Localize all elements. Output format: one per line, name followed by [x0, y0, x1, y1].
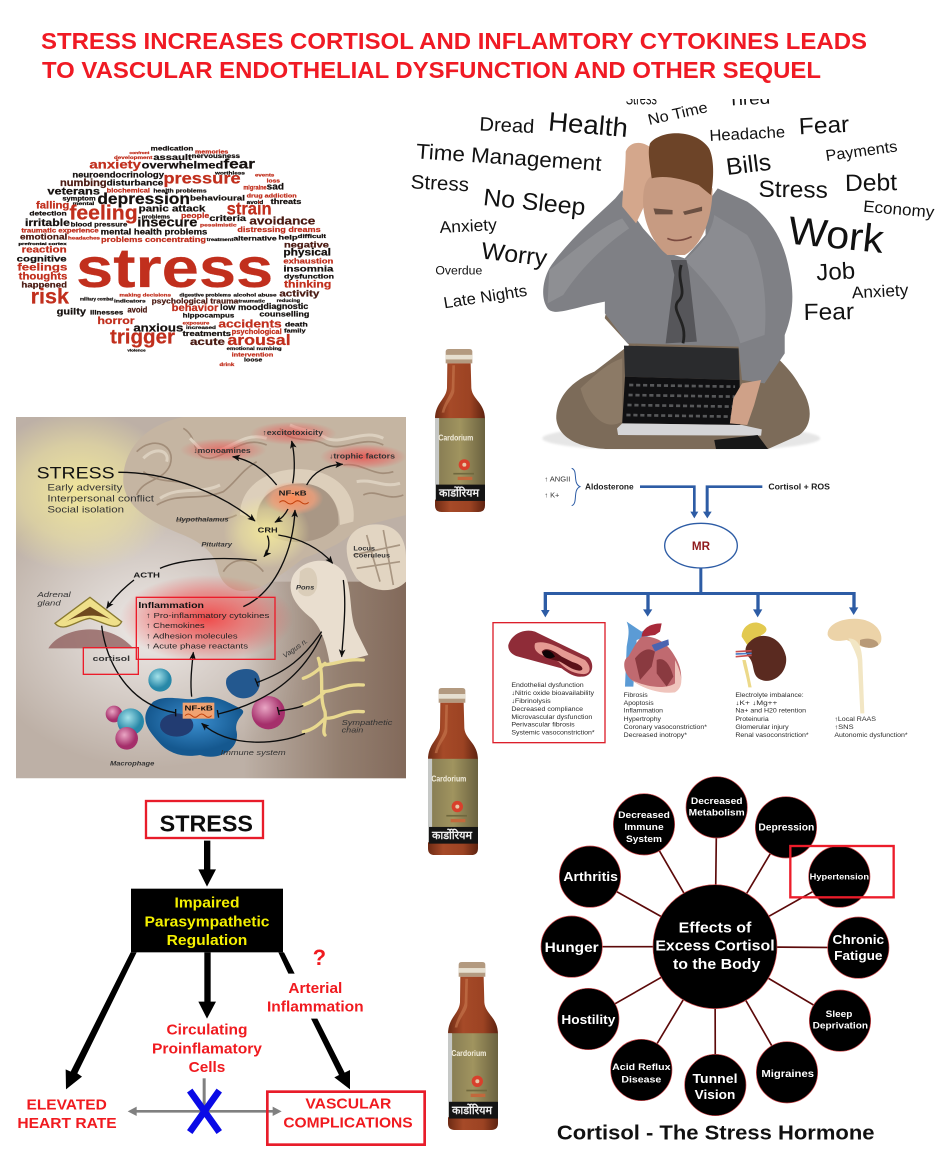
node: sleep deprivation: Deprivation	[813, 1020, 868, 1030]
panel: stress word cloud brain: medication	[151, 146, 193, 153]
panel: mineralocorticoid receptor diagram	[493, 468, 908, 743]
laptop	[617, 346, 768, 449]
red labels: HEART RATE	[17, 1115, 117, 1132]
panel: stress word cloud brain: psychological trauma	[152, 296, 239, 305]
node: decreased metabolism: Metabolism	[689, 808, 745, 818]
brain labels: NF-κB	[279, 488, 307, 497]
node: acid reflux disease: Disease	[621, 1074, 661, 1084]
inflammation callout box: ↑ Adhesion molecules	[146, 631, 238, 640]
panel: stress flow chart	[17, 801, 425, 1145]
panel: stress word cloud brain: behavioural	[190, 194, 245, 203]
panel: stress word cloud brain: prefrontal cortex	[18, 241, 68, 246]
MR oval	[665, 523, 737, 568]
kidney column: Electrolyte imbalance:	[735, 692, 804, 699]
panel: stress word cloud brain: difficult	[298, 234, 326, 240]
node: hunger	[541, 916, 602, 977]
panel: stress word cloud brain: illnesses	[90, 309, 124, 316]
stress heading in brain panel: Early adversity	[47, 482, 123, 492]
italic anatomy labels: Pons	[296, 586, 315, 592]
node: depression: Depression	[758, 823, 814, 834]
panel: stress word cloud brain: problems	[142, 214, 170, 220]
panel: stress word cloud brain: traumatic experience	[21, 228, 100, 234]
heart column: Inflammation	[624, 708, 664, 715]
blood vessel column with red box: Perivascular fibrosis	[511, 722, 575, 729]
panel: stress word cloud brain: veterans	[47, 186, 101, 197]
panel: stress word cloud brain: diagnostic	[263, 302, 309, 311]
stress heading in brain panel: STRESS	[37, 463, 115, 482]
stress box	[146, 801, 263, 838]
brain labels: ↓trophic factors	[329, 453, 395, 460]
node: arthritis: Arthritis	[563, 869, 618, 884]
panel: stress word cloud brain: happened	[21, 281, 67, 290]
heart column: Coronary vasoconstriction*	[624, 724, 708, 731]
floating stress words: Job	[816, 258, 856, 286]
kidney column: ↓K+ ↓Mg++	[735, 700, 778, 707]
italic anatomy labels: Pituitary	[201, 542, 233, 548]
panel: stress word cloud brain: falling	[36, 201, 69, 212]
panel: stress word cloud brain: activity	[279, 289, 319, 299]
panel: stress word cloud brain: avoid	[127, 305, 147, 315]
panel: stress word cloud brain: headaches	[68, 235, 101, 240]
node: chronic fatigue: Fatigue	[834, 949, 882, 963]
blood vessel column with red box: ↓Fibrinolysis	[511, 698, 551, 705]
heart column	[624, 622, 708, 739]
inputs: ↑ ANGII	[544, 477, 570, 484]
panel: stress word cloud brain: arousal	[227, 333, 291, 349]
node: tunnel vision: Tunnel	[692, 1072, 737, 1086]
icon: tonic bottle 2: Cardorium	[431, 775, 466, 784]
panel: stress word cloud brain: nervousness	[192, 153, 240, 160]
icon: tonic bottle 2	[428, 688, 478, 855]
adrenal gland	[48, 597, 133, 648]
panel: stress word cloud brain: panic attack	[139, 204, 205, 214]
panel: stress word cloud brain: events	[255, 173, 275, 178]
panel: stress word cloud brain: risk	[31, 284, 69, 308]
hub: Effects of	[679, 921, 751, 937]
panel: stress word cloud brain: trigger	[110, 326, 175, 348]
panel: stress word cloud brain: treatment	[207, 237, 234, 242]
node: decreased immune system	[613, 794, 675, 855]
floating stress words: Headache	[709, 124, 786, 145]
floating stress words: Tired	[727, 90, 771, 110]
blood vessel column with red box: ↓Nitric oxide bioavailability	[511, 690, 595, 697]
inflammation callout box	[136, 597, 275, 659]
inflammation callout box: ↑ Chemokines	[146, 621, 205, 630]
kidney column: Na+ and H20 retention	[735, 708, 807, 715]
spokes	[572, 807, 858, 1085]
NF-kB macrophage tag	[183, 703, 214, 719]
vascular complications box	[267, 1092, 425, 1145]
pathway arrows	[102, 441, 345, 742]
icon: tonic bottle 3	[448, 962, 498, 1130]
main word: stress: stress	[76, 236, 273, 299]
italic anatomy labels: gland	[37, 599, 62, 608]
panel: stress word cloud brain: mental health problems	[101, 227, 208, 236]
panel: stress word cloud brain: exhaustion	[283, 257, 334, 266]
icon: tonic bottle 2: कार्डोरियम	[431, 828, 473, 842]
icon: tonic bottle 1: कार्डोरियम	[438, 485, 480, 499]
panel: stress word cloud brain: counselling	[259, 309, 310, 318]
italic anatomy labels: Immune system	[221, 748, 286, 757]
arrow: to elevated heart rate	[66, 952, 137, 1089]
floating stress words: Economy	[862, 197, 936, 222]
blood vessel column with red box: Microvascular dysfunction	[511, 714, 593, 721]
panel: stress word cloud brain: disturbance	[107, 179, 164, 188]
red labels: Circulating	[166, 1022, 247, 1039]
panel: stress word cloud brain: family	[284, 328, 307, 334]
panel: stress word cloud brain: strain	[227, 198, 272, 218]
panel: stress word cloud brain: blood pressure	[71, 221, 128, 228]
panel: stress word cloud brain: increased	[186, 325, 216, 331]
panel: stress word cloud brain: help	[278, 235, 298, 242]
node: acid reflux disease: Acid Reflux	[612, 1062, 671, 1072]
floating stress words: Fear	[798, 111, 850, 140]
panel: stressed man photo with words	[410, 88, 936, 452]
panel: stress word cloud brain: dysfunction	[284, 273, 334, 280]
panel: stress word cloud brain: intervention	[232, 353, 274, 359]
floating stress words	[410, 88, 936, 326]
blood vessel column with red box: Systemic vasoconstriction*	[511, 730, 595, 737]
MR oval: MR	[692, 540, 711, 553]
panel: stress word cloud brain: confront	[129, 150, 150, 155]
blue cross	[192, 1093, 217, 1129]
panel: stress word cloud brain: overwhelmed	[142, 161, 223, 172]
panel: stress word cloud brain: traumatic	[238, 298, 265, 304]
node: hypertension: Hypertension	[810, 872, 869, 882]
panel: stress word cloud brain: people	[181, 211, 209, 220]
panel: stress word cloud brain: worthless	[214, 170, 245, 176]
italic anatomy labels: Macrophage	[110, 761, 155, 767]
panel: stress word cloud brain: sad	[267, 181, 284, 191]
red labels: ?	[313, 945, 326, 970]
kidney column: Renal vasoconstriction*	[735, 732, 809, 739]
panel: stress word cloud brain: assault	[153, 152, 192, 162]
arrow: to vascular complications	[311, 1019, 350, 1089]
seated man figure	[542, 133, 820, 452]
panel: stress word cloud brain: exposure	[183, 320, 210, 325]
panel: stress word cloud brain: detection	[29, 211, 67, 218]
floating stress words: Stress	[758, 176, 828, 204]
node: decreased metabolism	[686, 777, 747, 838]
italic anatomy labels: Adrenal	[36, 590, 71, 599]
node: hypertension	[809, 846, 870, 907]
icon: tonic bottle 3: Cardorium	[451, 1049, 486, 1058]
node: decreased immune system: Immune	[624, 822, 664, 832]
brain labels: ↓monoamines	[193, 448, 251, 455]
caption: Cortisol - The Stress Hormone	[557, 1121, 874, 1144]
panel: stress word cloud brain: irritable	[25, 218, 71, 229]
regulation box: Impaired	[174, 895, 239, 912]
icon: tonic bottle 1	[435, 349, 485, 512]
inputs: Cortisol + ROS	[768, 481, 830, 491]
panel: stress word cloud brain: emotional numbing	[227, 346, 282, 352]
floating stress words: Overdue	[435, 264, 483, 277]
panel: stress word cloud brain: accidents	[218, 318, 282, 330]
node: depression	[755, 797, 817, 858]
panel: stress word cloud brain: fear	[223, 155, 256, 171]
panel: stress word cloud brain: threats	[271, 197, 301, 206]
panel: stress word cloud brain: military combat	[80, 297, 114, 302]
icon: tonic bottle 1: Cardorium	[438, 433, 473, 442]
panel: stress word cloud brain	[17, 146, 334, 367]
vascular complications box: VASCULAR	[305, 1096, 392, 1113]
brain labels: ACTH	[133, 571, 161, 580]
panel: stress word cloud brain: criteria	[209, 213, 246, 223]
regulation box: Regulation	[167, 932, 247, 949]
blood vessel column with red box: Endothelial dysfunction	[511, 682, 584, 689]
italic anatomy labels: Locus	[353, 547, 376, 553]
panel: stress word cloud brain: reaction	[22, 245, 67, 255]
brain labels: cortisol	[93, 654, 130, 663]
red labels: Inflammation	[267, 999, 364, 1016]
node: migraines: Migraines	[761, 1069, 814, 1080]
panel: stress word cloud brain: horror	[97, 316, 135, 327]
panel: stress word cloud brain: thoughts	[19, 272, 67, 283]
red labels: ELEVATED	[26, 1097, 107, 1114]
panel: stress word cloud brain: psychological	[232, 329, 282, 336]
brain labels: ↑excitotoxicity	[262, 430, 323, 437]
panel: stress word cloud brain: health problems	[153, 188, 207, 194]
panel: stress word cloud brain: acute	[190, 337, 225, 348]
italic anatomy labels: Coeruleus	[353, 553, 391, 559]
italic anatomy labels: Vagus n.	[281, 636, 309, 660]
panel: stress word cloud brain: indicators	[114, 298, 146, 304]
panel: stress word cloud brain: anxiety	[89, 158, 141, 172]
arrow: to arterial inflammation	[278, 952, 295, 974]
cerebellum and brainstem	[291, 524, 406, 665]
hub: to the Body	[673, 957, 761, 973]
panel: stress word cloud brain: depression	[97, 191, 190, 208]
inflammation callout box: ↑ Pro-inflammatory cytokines	[146, 611, 270, 620]
brain labels	[93, 430, 395, 663]
panel: stress word cloud brain: behavior	[172, 303, 218, 314]
node: sleep deprivation: Sleep	[826, 1009, 853, 1019]
inputs: Aldosterone	[585, 481, 634, 491]
node: decreased immune system: Decreased	[618, 810, 670, 820]
panel: stress word cloud brain: mental	[73, 201, 95, 207]
panel: stress word cloud brain: drink	[219, 362, 235, 367]
node: decreased metabolism: Decreased	[691, 796, 743, 806]
kidney column: Proteinuria	[735, 716, 769, 723]
panel: stress word cloud brain: physical	[283, 248, 331, 259]
stress heading in brain panel: Social isolation	[47, 505, 124, 515]
panel: stress word cloud brain: death	[285, 322, 308, 329]
brain and spine column: ↑SNS	[834, 724, 854, 731]
floating stress words: Bills	[724, 149, 773, 181]
regulation box: Parasympathetic	[144, 913, 269, 930]
italic anatomy labels: Hypothalamus	[176, 517, 230, 523]
floating stress words: Stress	[410, 172, 470, 196]
panel: stress word cloud brain: development	[114, 155, 153, 161]
panel: stress word cloud brain: treatments	[183, 329, 231, 338]
heart column: Fibrosis	[624, 692, 648, 699]
node: sleep deprivation	[809, 990, 871, 1051]
panel: stress word cloud brain: guilty	[57, 306, 87, 316]
inputs	[544, 468, 830, 506]
heart column: Hypertrophy	[624, 716, 662, 723]
node: hostility: Hostility	[561, 1013, 615, 1027]
node: hunger: Hunger	[545, 939, 599, 955]
hub: Excess Cortisol	[655, 939, 775, 955]
heart column: Apoptosis	[624, 700, 654, 707]
floating stress words: Anxiety	[439, 215, 498, 237]
floating stress words: Anxiety	[851, 281, 909, 302]
node: decreased immune system: System	[626, 834, 662, 844]
panel: stress word cloud brain: low mood	[220, 302, 263, 312]
panel: stress word cloud brain: digestive problems	[179, 293, 231, 298]
brain labels: CRH	[258, 525, 278, 534]
panel: stress word cloud brain: memories	[195, 149, 228, 155]
panel: stress word cloud brain: alternative	[233, 236, 278, 242]
floating stress words: Worry	[480, 238, 550, 272]
node: tunnel vision	[685, 1054, 746, 1116]
floating stress words: Health	[547, 106, 629, 143]
italic anatomy labels	[36, 517, 393, 767]
stress heading in brain panel	[37, 463, 154, 515]
panel: stress word cloud brain: avoidance	[249, 215, 315, 227]
sympathetic chain	[303, 658, 363, 735]
panel: stress word cloud brain: feeling	[69, 203, 138, 225]
title: STRESS INCREASES CORTISOL AND INFLAMTORY CYTOKINES LEADS	[41, 28, 867, 54]
inputs: ↑ K+	[544, 493, 559, 500]
panel: stress word cloud brain: neuroendocrinology	[72, 171, 165, 180]
inflammation callout box: ↑ Acute phase reactants	[146, 641, 248, 650]
floating stress words: Late Nights	[442, 282, 528, 312]
node: chronic fatigue	[828, 917, 889, 978]
italic anatomy labels: chain	[342, 725, 363, 734]
brain and spine column	[828, 619, 908, 739]
red labels: Proinflamatory	[152, 1040, 263, 1057]
kidney column	[735, 622, 809, 739]
floating stress words: Work	[786, 208, 887, 262]
brain and spine column: Autonomic dysfunction*	[834, 732, 908, 739]
panel: effects of excess cortisol wheel	[541, 777, 894, 1144]
panel: stress word cloud brain: cognitive	[17, 253, 67, 263]
panel: stress word cloud brain: avoid	[247, 200, 263, 206]
red labels: Cells	[189, 1059, 225, 1076]
node: hostility	[558, 988, 619, 1050]
title	[41, 28, 867, 83]
floating stress words: Stress	[626, 88, 657, 108]
connector arrows	[541, 485, 858, 617]
panel: stress word cloud brain: feelings	[17, 262, 68, 273]
panel: stress word cloud brain: loss	[267, 178, 280, 184]
red labels	[17, 945, 364, 1132]
regulation box	[131, 889, 283, 952]
icon: tonic bottle 3: कार्डोरियम	[451, 1103, 493, 1117]
hub	[653, 885, 777, 1009]
panel: brain stress pathway illustration	[0, 412, 407, 778]
floating stress words: Dread	[479, 114, 535, 138]
arrow: to circulating cells	[198, 952, 216, 1019]
cerebrum	[123, 417, 406, 591]
node: arthritis	[559, 846, 621, 907]
NF-kB macrophage tag: NF-κB	[184, 703, 213, 712]
panel: stress word cloud brain: thinking	[284, 280, 331, 291]
glow halos	[120, 422, 407, 662]
stress heading in brain panel: Interpersonal conflict	[47, 493, 154, 503]
floating stress words: Payments	[825, 139, 898, 165]
panel: stress word cloud brain: violence	[127, 348, 147, 353]
arrow: stress to regulation	[198, 841, 216, 887]
panel: stress word cloud brain: numbing	[60, 178, 107, 189]
heart column: Decreased inotropy*	[624, 732, 688, 739]
panel: stress word cloud brain: symptom	[62, 196, 96, 203]
panel: stress word cloud brain: pressure	[163, 170, 241, 187]
panel: stress word cloud brain: emotional	[20, 233, 67, 242]
blood vessel column with red box: Decreased compliance	[511, 706, 584, 713]
vascular complications box: COMPLICATIONS	[283, 1114, 413, 1131]
panel: stress word cloud brain: insecure	[137, 216, 197, 230]
title: TO VASCULAR ENDOTHELIAL DYSFUNCTION AND OTHER SEQUEL	[42, 57, 821, 83]
floating stress words: No Sleep	[482, 185, 587, 221]
panel: stress word cloud brain: anxious	[133, 323, 183, 335]
panel: stress word cloud brain: problems concentrating	[101, 235, 206, 244]
immune cells	[106, 668, 285, 757]
panel: stress word cloud brain: alcohol abuse	[233, 293, 277, 299]
stress box: STRESS	[160, 811, 253, 837]
floating stress words: Fear	[803, 299, 854, 326]
node: tunnel vision: Vision	[695, 1088, 735, 1102]
red labels: Arterial	[288, 980, 342, 997]
panel: stress word cloud brain: biochemical	[107, 187, 150, 194]
floating stress words: No Time	[646, 99, 709, 129]
panel: stress word cloud brain: loose	[244, 358, 262, 364]
floating stress words: Time Management	[415, 139, 602, 176]
grey connector arrows	[128, 1078, 282, 1116]
brain and spine column: ↑Local RAAS	[834, 716, 876, 723]
blood vessel column with red box	[493, 623, 605, 743]
floating stress words: Debt	[845, 170, 898, 197]
cortisol callout box	[83, 648, 138, 674]
panel: stress word cloud brain: reducing	[277, 298, 300, 303]
kidney column: Glomerular injury	[735, 724, 790, 731]
panel: stress word cloud brain: pessimistic	[200, 223, 237, 229]
node: chronic fatigue: Chronic	[832, 933, 884, 947]
panel: stress word cloud brain: making decisions	[119, 293, 171, 299]
hypertension highlight box	[790, 846, 894, 897]
inflammation callout box: Inflammation	[138, 600, 204, 610]
panel: stress word cloud brain: drug addiction	[247, 194, 297, 200]
panel: stress word cloud brain: negative	[284, 240, 330, 249]
italic anatomy labels: Sympathetic	[342, 718, 393, 727]
panel: stress word cloud brain: migraine	[243, 185, 267, 191]
panel: stress word cloud brain: distressing dreams	[237, 225, 321, 234]
panel: stress word cloud brain: insomnia	[283, 263, 334, 273]
node: acid reflux disease	[611, 1039, 672, 1101]
panel: stress word cloud brain: hippocampus	[183, 313, 235, 320]
node: migraines	[756, 1042, 818, 1103]
